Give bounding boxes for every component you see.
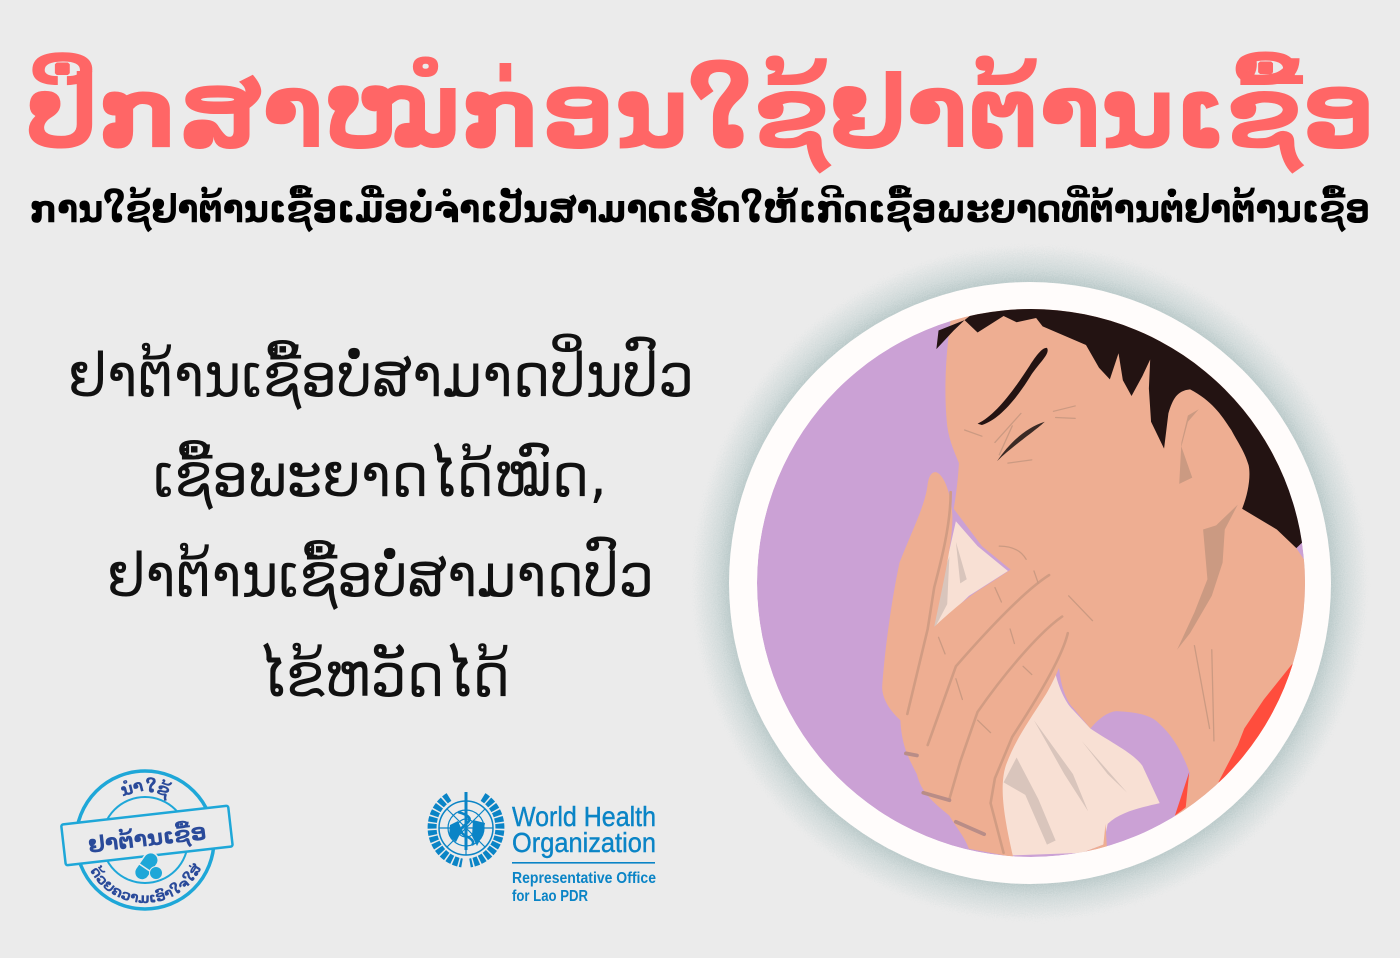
title: ປຶກສາໝໍກ່ອນໃຊ້ຢາຕ້ານເຊື [25, 54, 1288, 171]
body text: ເຊື້ອພະຍາດໄດ້ໝົດ, [153, 439, 607, 511]
logo: antibiotics stamp: ຢາຕ້ານເຊື້ອ [87, 818, 208, 859]
body text: ໄຂ້ຫວັດໄດ້ [258, 641, 510, 711]
body text: ຢາຕ້ານເຊື້ອບໍ່ສາມາດປິ່ນປົວ [68, 333, 694, 411]
logo: World Health Organization: for Lao PDR [512, 888, 588, 905]
body text: ຢາຕ້ານເຊື້ອບໍ່ສາມາດປົວ [107, 536, 654, 611]
logo: World Health Organization: Organization [512, 827, 656, 858]
title: ອ [1302, 54, 1375, 171]
logo: antibiotics stamp: ດ້ວຍຄວາມເອົາໃຈໃສ່ [90, 863, 201, 904]
illustration: person sneezing into tissue [692, 245, 1368, 921]
logo: antibiotics stamp [60, 769, 234, 911]
logo: antibiotics stamp: ນຳໃຊ້ [121, 777, 172, 801]
body text [68, 333, 694, 711]
logo: World Health Organization: World Health [512, 801, 656, 832]
logo: World Health Organization: Representative Office [512, 870, 656, 887]
logo: World Health Organization [432, 792, 656, 905]
